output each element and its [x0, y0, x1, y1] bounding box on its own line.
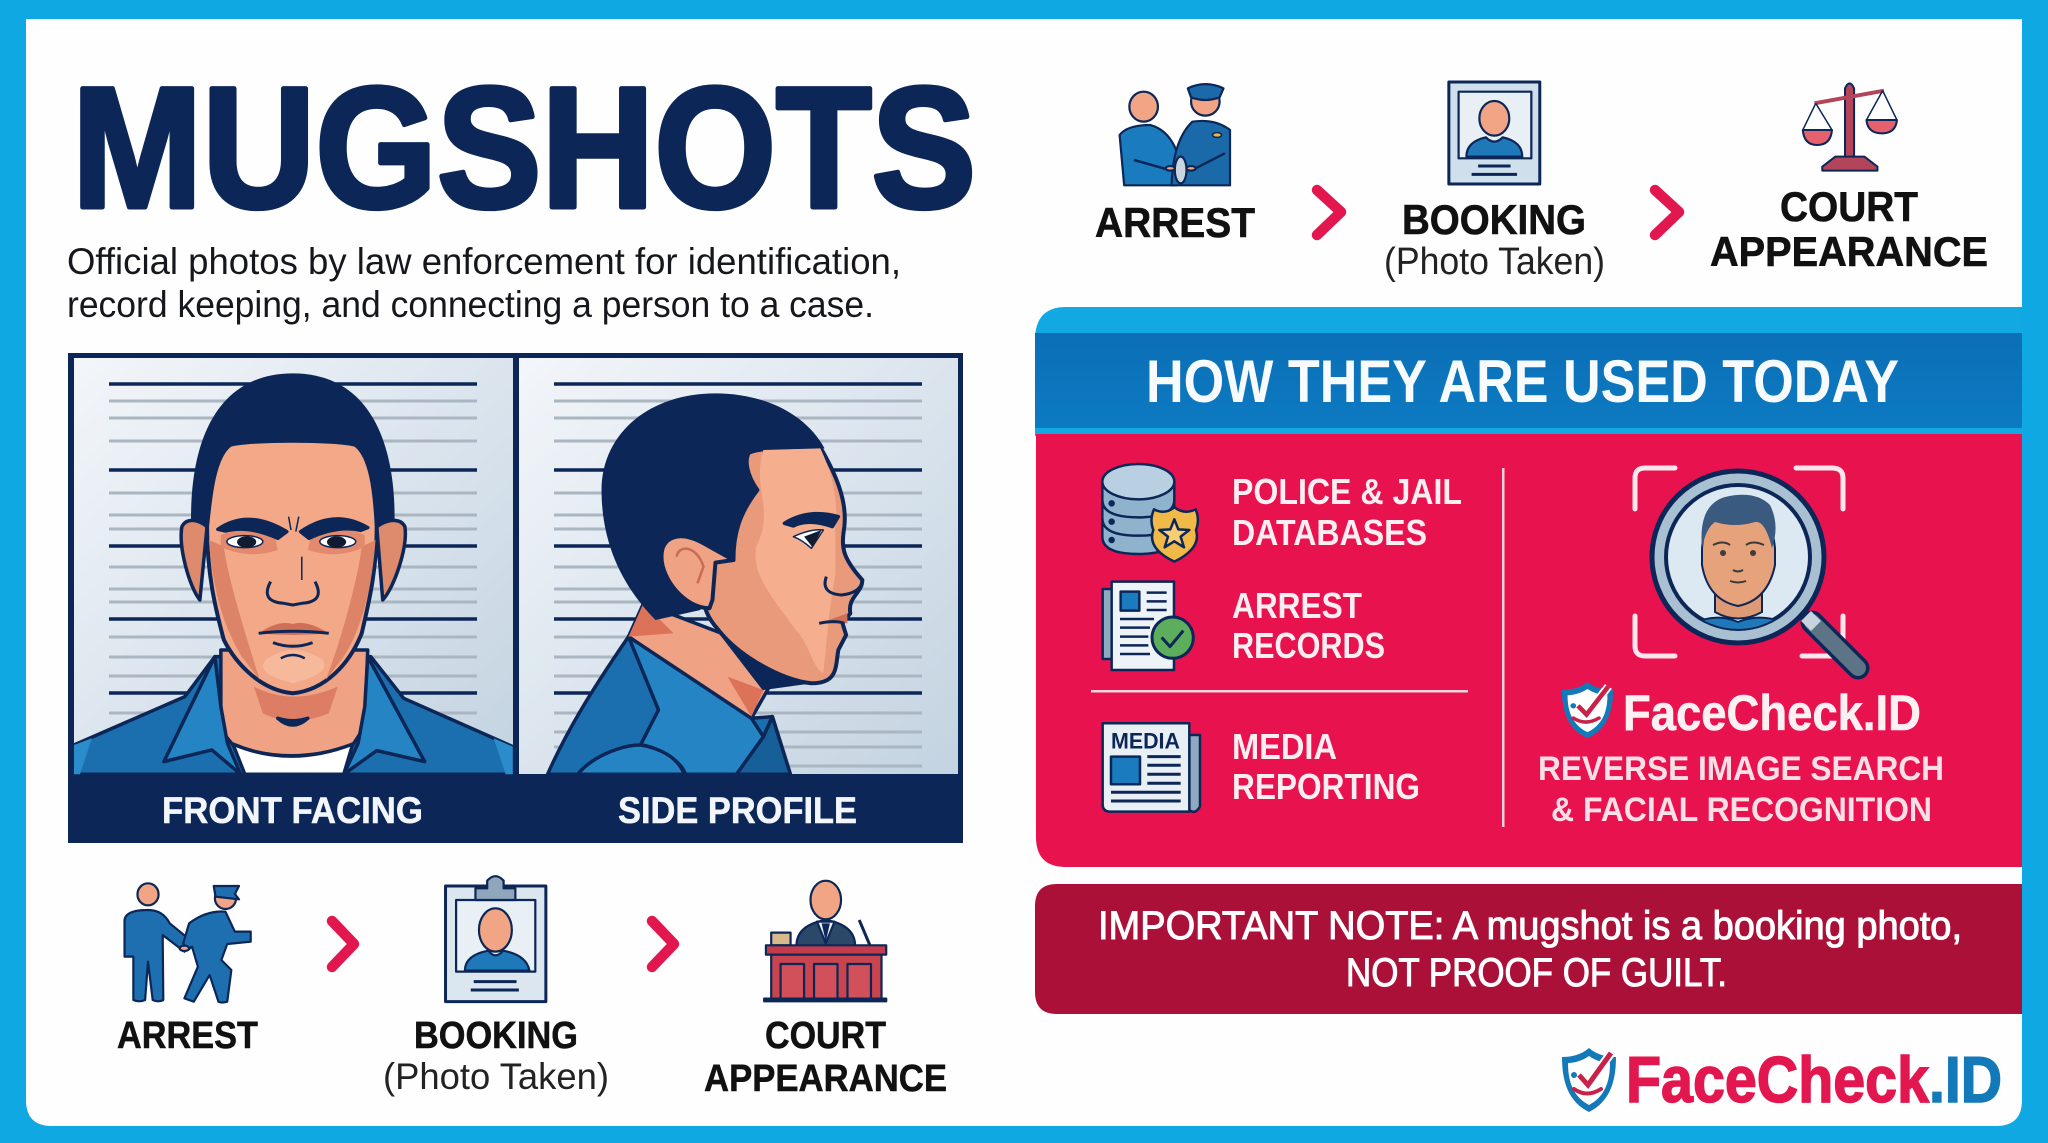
caption: front facing: FRONT FACING: [162, 790, 423, 831]
logo: FaceCheck.ID: .ID: [1929, 1043, 2002, 1116]
title: MUGSHOTS: [72, 52, 976, 244]
icon: officer arresting person: [1120, 84, 1230, 185]
label: booking: [1384, 196, 1605, 283]
icon: arrest: [125, 883, 251, 1002]
label: court appearance: [1710, 183, 1988, 275]
icon: arrest records: [1103, 582, 1193, 670]
label: arrest records: RECORDS: [1232, 625, 1385, 666]
label: booking: BOOKING: [414, 1015, 578, 1057]
panel: mugshot photos: [68, 353, 963, 843]
label: court appearance: COURT: [1780, 183, 1918, 230]
description: [67, 241, 901, 325]
icon: booking photo: [1449, 82, 1540, 184]
label: booking: (Photo Taken): [1384, 241, 1605, 283]
label: arrest records: ARREST: [1232, 585, 1362, 626]
label: arrest records: [1232, 585, 1385, 666]
arrow: [332, 921, 354, 967]
flow: bottom left: [117, 876, 947, 1100]
icon: booking clipboard: [446, 876, 546, 1002]
callout: important note: NOT PROOF OF GUILT.: [1346, 951, 1727, 995]
icon: media newspaper: [1103, 723, 1200, 812]
illustration: front facing man: [74, 373, 513, 774]
label: police and jail databases: DATABASES: [1232, 512, 1427, 553]
label: police and jail databases: [1232, 471, 1462, 553]
label: reverse image search: [1538, 750, 1944, 829]
arrow: [1655, 190, 1679, 235]
logo: FaceCheck.ID: FaceCheck: [1626, 1043, 1930, 1116]
label: arrest: ARREST: [1095, 199, 1255, 246]
label: court appearance: COURT: [765, 1015, 886, 1057]
flow: top right: [1095, 82, 1988, 283]
label: court appearance: APPEARANCE: [1710, 228, 1988, 275]
label: court appearance: [704, 1015, 947, 1100]
illustration: side profile man: [548, 393, 862, 774]
label: arrest: ARREST: [117, 1015, 258, 1057]
callout: important note: [1035, 884, 2022, 1014]
label: booking: (Photo Taken): [383, 1056, 609, 1097]
icon: database with badge: [1102, 464, 1198, 562]
brand name: FaceCheck.ID: [1623, 685, 1921, 741]
label: reverse image search: REVERSE IMAGE SEARCH: [1538, 750, 1944, 788]
description: Official photos by law enforcement for identification,: [67, 241, 901, 282]
arrow: [1317, 190, 1341, 235]
label: booking: [383, 1015, 609, 1097]
label: court appearance: APPEARANCE: [704, 1058, 947, 1100]
icon: face scan magnifier: [1635, 468, 1858, 668]
label: media reporting: [1232, 726, 1420, 807]
arrow: [652, 921, 674, 967]
callout: important note: IMPORTANT NOTE: A mugshot is a booking photo,: [1098, 904, 1962, 948]
icon: scales of justice: [1803, 83, 1897, 171]
logo: shield on red: [1562, 682, 1613, 738]
description: record keeping, and connecting a person to a case.: [67, 284, 874, 325]
icon: media newspaper: MEDIA: [1111, 728, 1180, 753]
label: police and jail databases: POLICE & JAIL: [1232, 471, 1462, 512]
label: booking: BOOKING: [1402, 196, 1586, 243]
label: reverse image search: & FACIAL RECOGNITION: [1551, 791, 1932, 829]
panel: how they are used today: [1035, 307, 2022, 867]
caption: side profile: SIDE PROFILE: [618, 790, 857, 831]
icon: court judge: [764, 881, 886, 1001]
label: media reporting: REPORTING: [1232, 766, 1420, 807]
heading: HOW THEY ARE USED TODAY: [1146, 348, 1899, 415]
label: media reporting: MEDIA: [1232, 726, 1337, 767]
